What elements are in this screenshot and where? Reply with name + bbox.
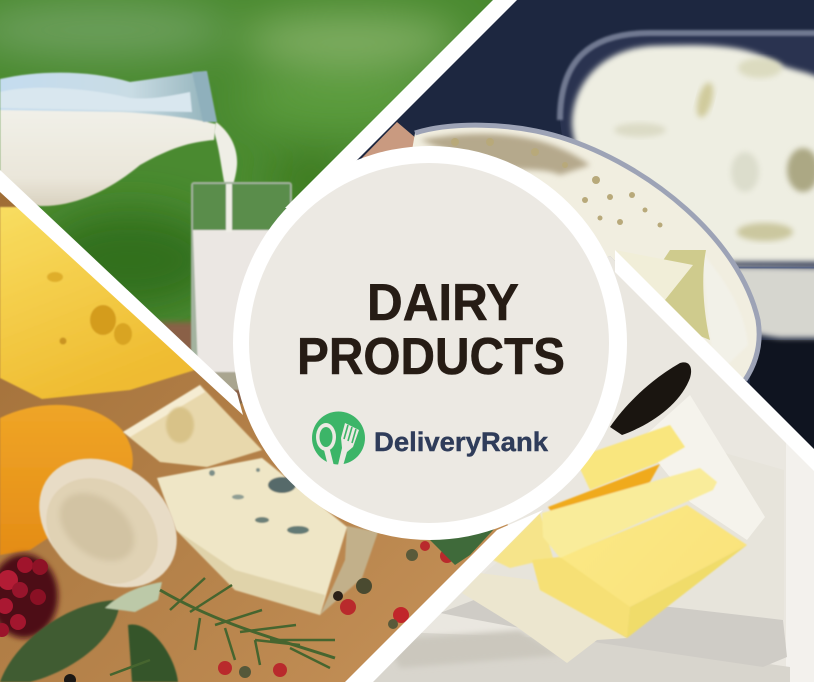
photo panel: bowls of cream and curd [356,0,814,449]
yellow cheese [0,207,195,399]
herbs near the board edge [430,528,495,565]
icon: milk bottle [0,71,217,206]
title: DAIRY [367,274,519,332]
photo panel: butter slices on a board [350,240,814,682]
front bowl [400,125,759,400]
tabletop [373,633,790,682]
orange cheese [0,405,133,555]
peppercorns [64,541,454,682]
rosemary [110,578,335,675]
title: PRODUCTS [297,328,565,386]
butter slices [493,425,747,638]
baking paper [462,395,765,663]
sage leaves [0,582,178,682]
icon: milk stream [214,122,238,183]
hard pale cheese [123,385,262,467]
logo: DeliveryRank [312,412,549,466]
right strip of table [786,440,814,682]
board [440,440,784,620]
back bowl [560,33,814,338]
table under the bowl [362,122,414,158]
blue cheese [157,458,378,615]
white rind round cheese [38,458,178,588]
icon: butter knife [610,362,691,435]
icon: glass of milk [191,182,292,390]
photo panel: cheese board [0,170,520,682]
photo panel: milk pouring into a glass [0,0,510,430]
wordmark: DeliveryRank [374,427,549,457]
center circle badge [233,146,627,540]
icon: green circle with spoon and fork [312,412,365,466]
pomegranate seeds [0,554,58,638]
title [297,274,565,386]
table edge [159,318,242,404]
